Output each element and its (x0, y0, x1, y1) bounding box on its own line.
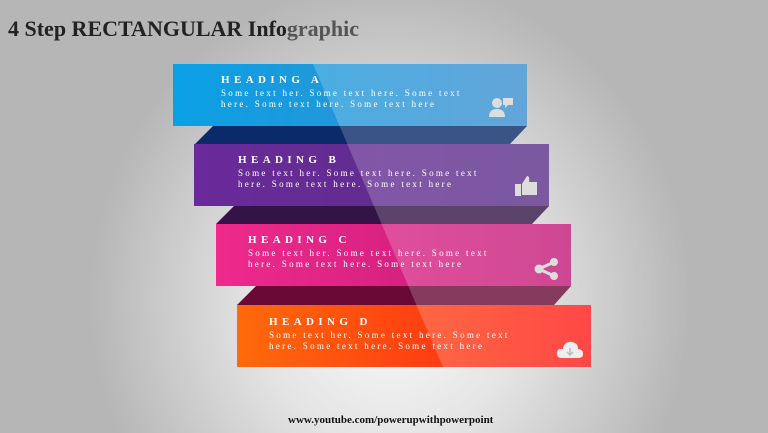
card A: Some text her. Some text here. Some text (221, 88, 462, 98)
card D: here. Some text here. Some text here (269, 340, 484, 350)
card D: Some text her. Some text here. Some text (269, 330, 510, 340)
card B: Some text her. Some text here. Some text (238, 168, 479, 178)
icon: chat user (489, 98, 513, 117)
card D (269, 316, 583, 358)
rectangles (173, 64, 591, 367)
card A: here. Some text here. Some text here (221, 98, 436, 108)
shadow bands (195, 126, 571, 305)
card B: here. Some text here. Some text here (238, 178, 453, 188)
card C: here. Some text here. Some text here (248, 258, 463, 268)
card C: HEADING C (248, 234, 351, 246)
card A: HEADING A (221, 74, 323, 86)
card B (238, 154, 537, 196)
card D: HEADING D (269, 316, 372, 328)
icon: share (534, 258, 558, 280)
title: 4 Step RECTANGULAR Infographic (8, 16, 359, 41)
card C: Some text her. Some text here. Some text (248, 248, 489, 258)
steps graphic (173, 64, 591, 367)
footer url: www.youtube.com/powerupwithpowerpoint (288, 414, 493, 426)
diagonal highlight (313, 64, 600, 367)
card A (221, 74, 513, 117)
card B: HEADING B (238, 154, 340, 166)
icon: thumbs up (515, 176, 537, 196)
card C (248, 234, 558, 280)
icon: cloud download (556, 342, 583, 358)
